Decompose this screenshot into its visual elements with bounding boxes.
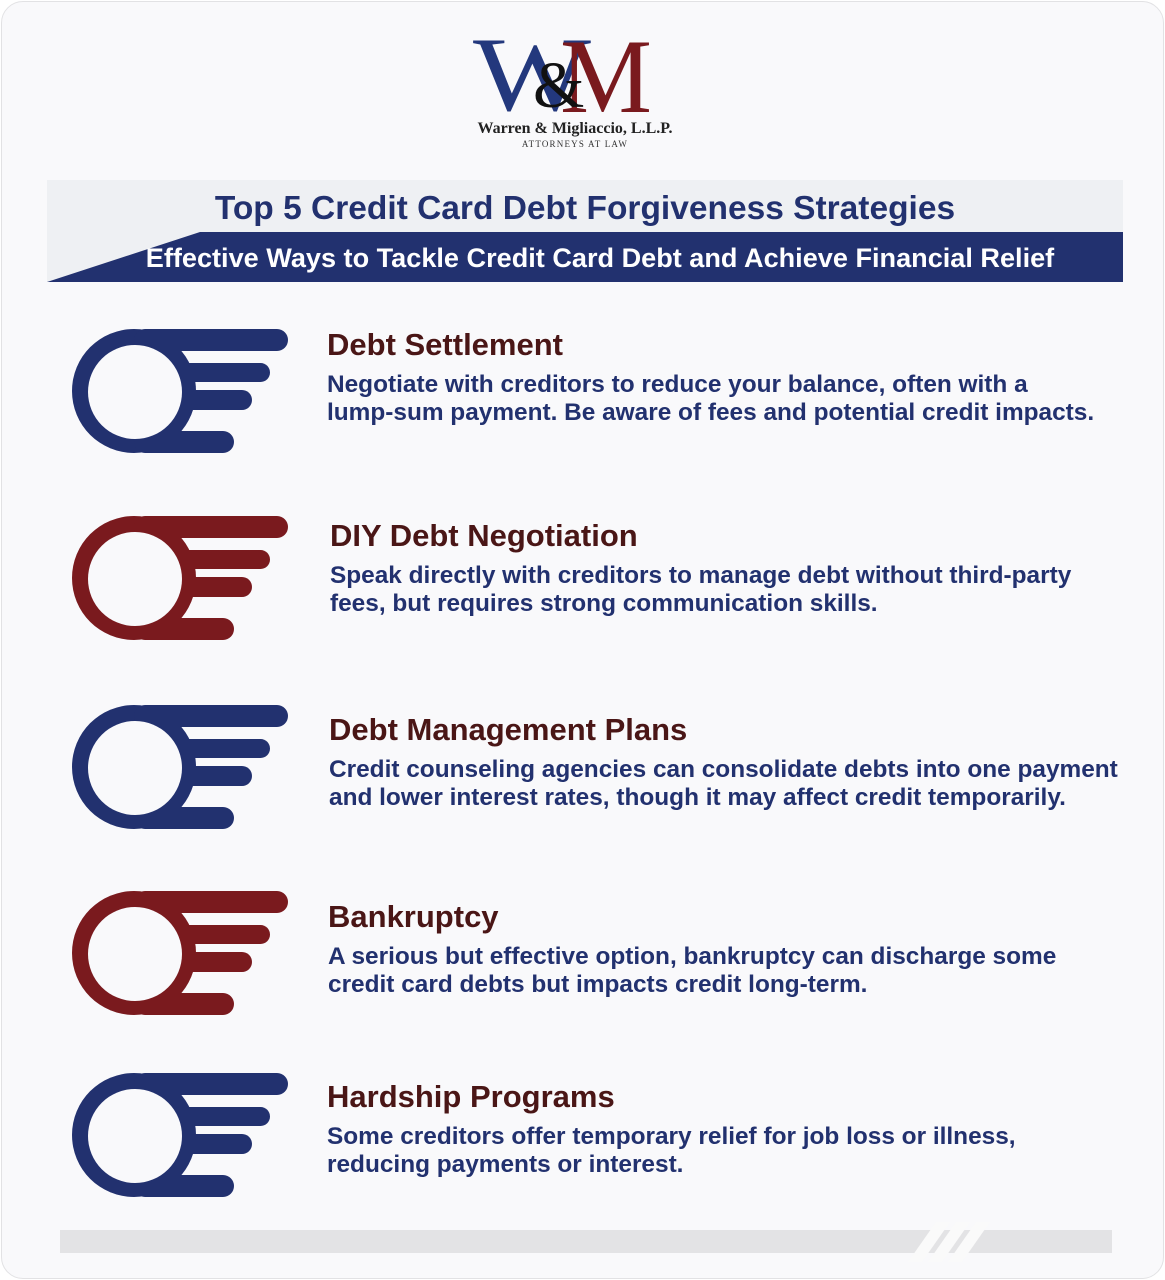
text block: A serious but effective option, bankruptcy can discharge some bbox=[328, 943, 1056, 970]
icon: speed circle bbox=[72, 516, 288, 640]
text block: Speak directly with creditors to manage debt without third-party bbox=[330, 562, 1071, 589]
icon: speed circle bbox=[72, 891, 288, 1015]
text block bbox=[329, 712, 1118, 811]
item 3 bbox=[72, 705, 1118, 829]
text block bbox=[327, 1079, 1016, 1178]
text block: Debt Management Plans bbox=[329, 712, 687, 747]
logo bbox=[473, 25, 673, 149]
item 2 bbox=[72, 516, 1072, 640]
text block: Debt Settlement bbox=[327, 327, 563, 362]
subtitle: Effective Ways to Tackle Credit Card Debt and Achieve Financial Relief bbox=[146, 242, 1054, 273]
icon: speed circle bbox=[72, 1073, 288, 1197]
title: Top 5 Credit Card Debt Forgiveness Strategies bbox=[215, 190, 955, 227]
text block: and lower interest rates, though it may affect credit temporarily. bbox=[329, 784, 1066, 811]
text block bbox=[328, 899, 1056, 998]
text block bbox=[330, 518, 1072, 617]
icon: speed circle bbox=[72, 329, 288, 453]
footer bar bbox=[60, 1230, 1112, 1253]
text block: Negotiate with creditors to reduce your balance, often with a bbox=[327, 371, 1028, 398]
text block: Credit counseling agencies can consolidate debts into one payment bbox=[329, 756, 1118, 783]
text block: fees, but requires strong communication skills. bbox=[330, 590, 878, 617]
icon: speed circle bbox=[72, 705, 288, 829]
text block: Bankruptcy bbox=[328, 899, 499, 934]
text block: reducing payments or interest. bbox=[327, 1151, 683, 1178]
text block: lump-sum payment. Be aware of fees and potential credit impacts. bbox=[327, 399, 1094, 426]
text block: Hardship Programs bbox=[327, 1079, 615, 1114]
text block: credit card debts but impacts credit long-term. bbox=[328, 971, 867, 998]
logo: Warren & Migliaccio, L.L.P. bbox=[477, 120, 673, 137]
header banner bbox=[47, 180, 1123, 282]
text block: DIY Debt Negotiation bbox=[330, 518, 638, 553]
item 4 bbox=[72, 891, 1056, 1015]
item 5 bbox=[72, 1073, 1016, 1197]
text block bbox=[327, 327, 1094, 426]
logo: & bbox=[533, 49, 584, 122]
item 1 bbox=[72, 327, 1094, 453]
logo: ATTORNEYS AT LAW bbox=[522, 139, 628, 149]
text block: Some creditors offer temporary relief for job loss or illness, bbox=[327, 1123, 1016, 1150]
